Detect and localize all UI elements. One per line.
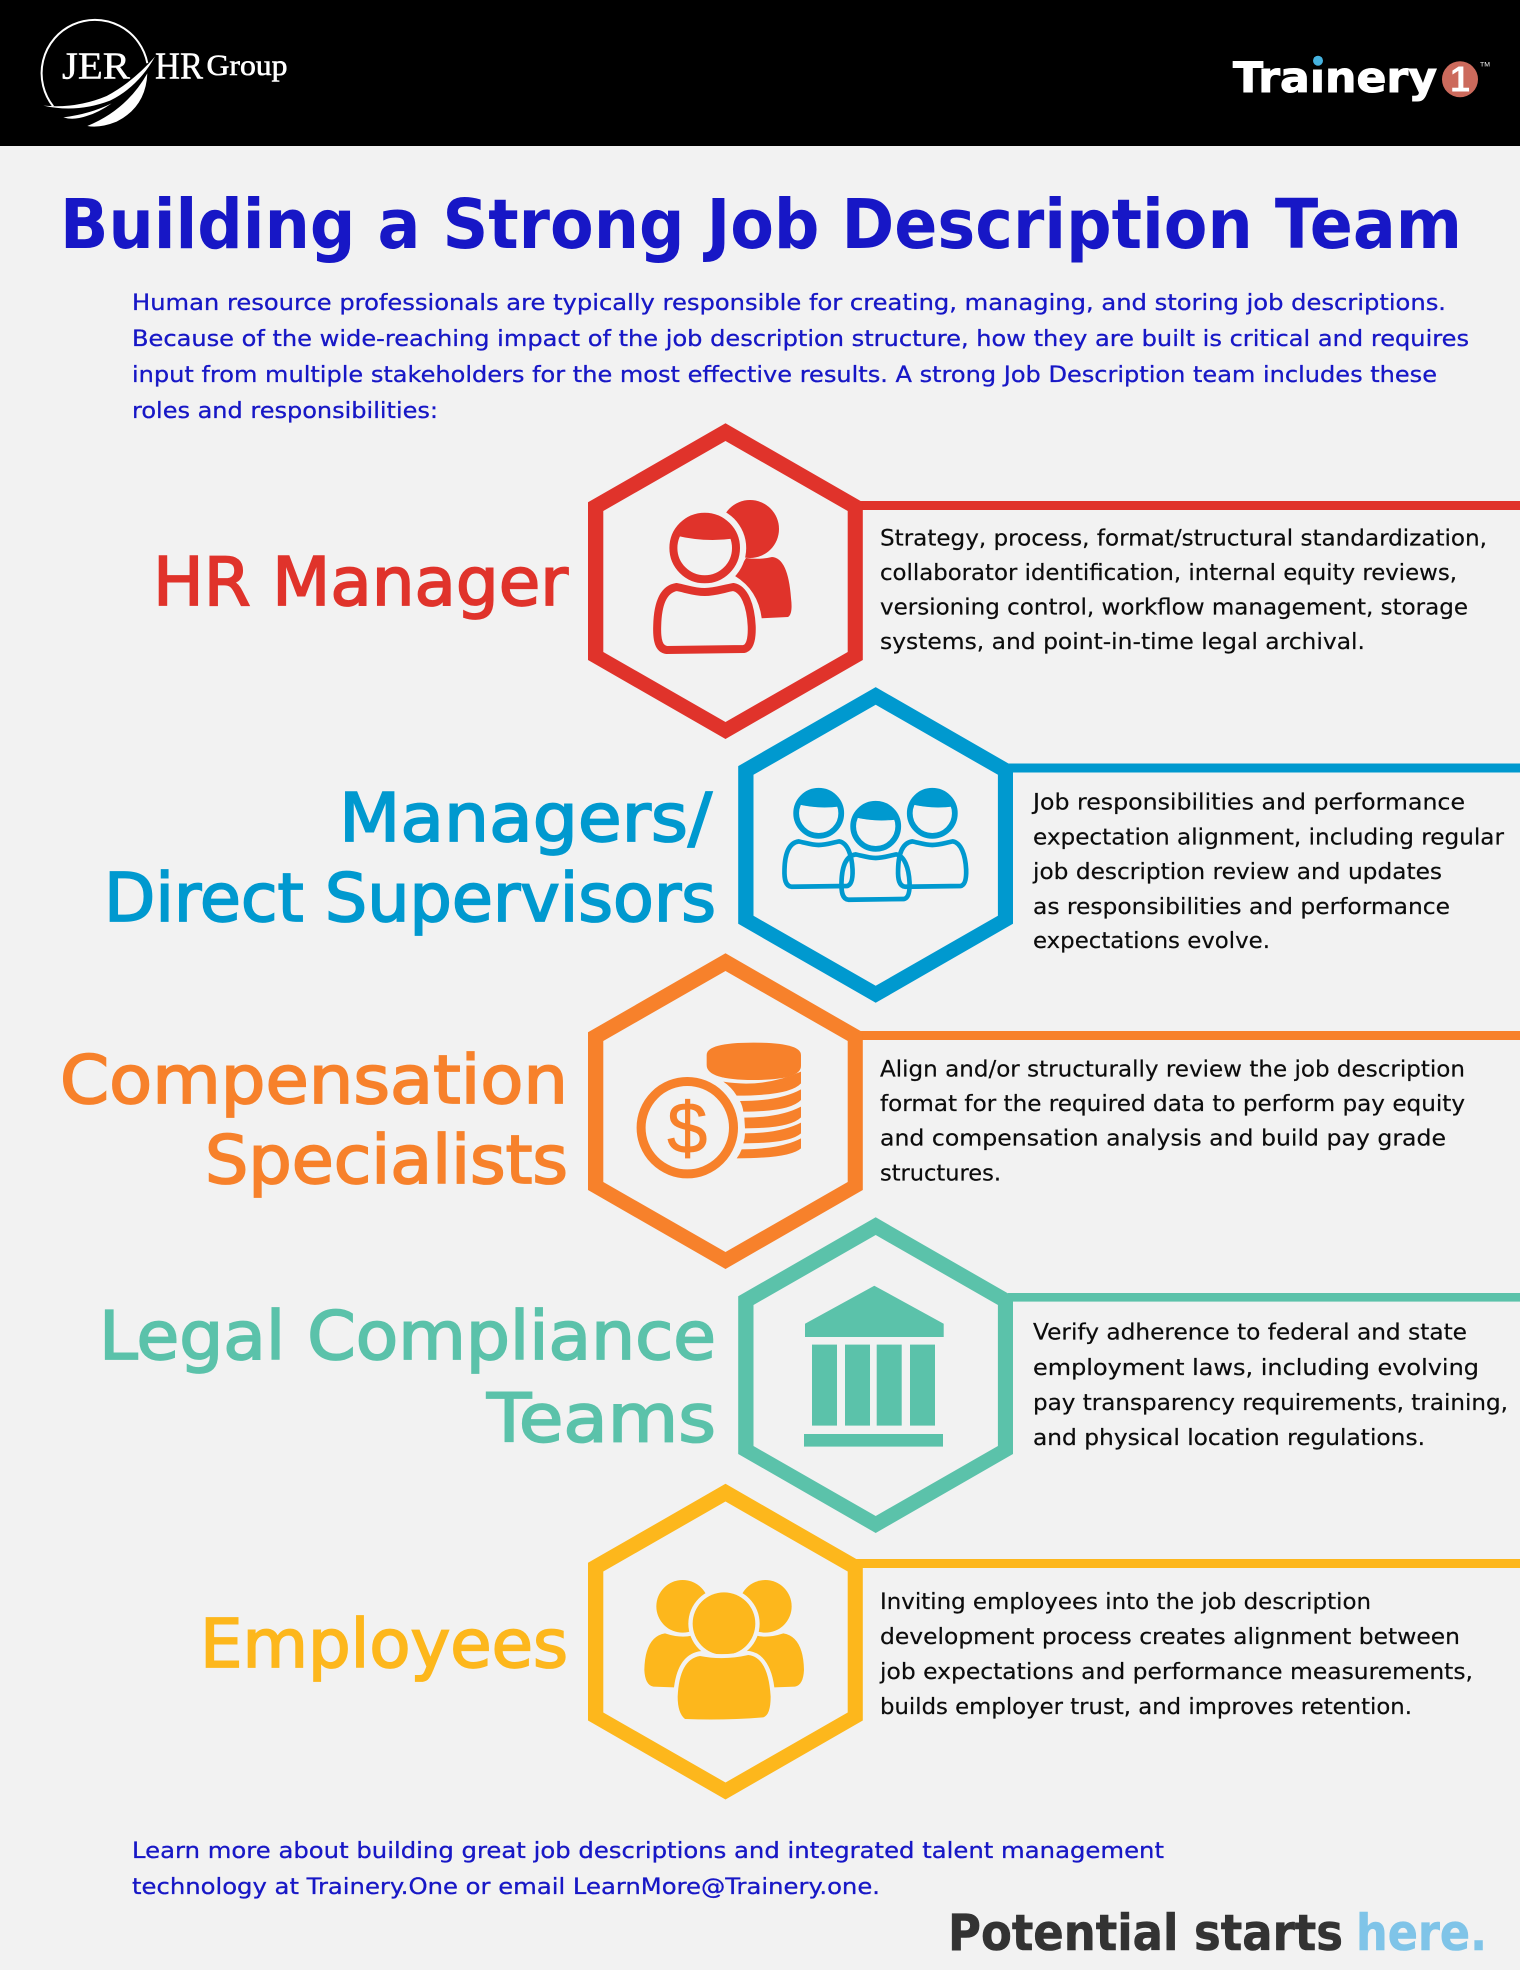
role description: structures. (880, 1162, 1001, 1186)
panel: Managers / Direct Supervisors (104, 687, 1520, 1003)
role title: Legal Compliance (99, 1297, 716, 1375)
role description: pay transparency requirements, training, (1033, 1391, 1508, 1416)
role description (1031, 790, 1505, 954)
hexagon yellow (588, 1484, 863, 1800)
hexagon blue (738, 687, 1013, 1003)
logo: JER HR Group (42, 20, 287, 127)
role description (880, 1058, 1465, 1186)
role description: development process creates alignment between (880, 1625, 1460, 1650)
icon: manager with colleague (657, 500, 792, 650)
intro paragraph (132, 290, 1469, 424)
role description: job expectations and performance measurements, (879, 1660, 1473, 1685)
connector line orange (858, 1031, 1520, 1040)
role description: collaborator identification, internal equity reviews, (880, 561, 1457, 586)
logo: JER HR Group: HR (155, 45, 204, 87)
role description: job description review and updates (1032, 860, 1442, 885)
connector line blue (1008, 764, 1520, 772)
role description: Job responsibilities and performance (1031, 790, 1465, 816)
logo: Trainery One: 1 (1450, 59, 1470, 100)
role description: as responsibilities and performance (1033, 895, 1450, 920)
tagline: here. (1356, 1904, 1487, 1962)
role title (104, 779, 716, 937)
role title (99, 1297, 716, 1458)
role title: Teams (486, 1380, 716, 1458)
panel: Legal Compliance Teams (99, 1217, 1520, 1533)
role title: Compensation (60, 1041, 568, 1119)
role description (879, 1590, 1473, 1720)
footer call to action (132, 1838, 1164, 1900)
hexagon red (588, 423, 863, 739)
icon: three team members (784, 791, 966, 900)
role description: Strategy, process, format/structural standardization, (880, 526, 1487, 552)
role description: versioning control, workflow management, storage (880, 596, 1468, 620)
footer call to action: technology at Trainery.One or email LearnMore@Trainery.one. (132, 1874, 880, 1900)
role description: and compensation analysis and build pay grade (880, 1127, 1446, 1152)
role title: Direct Supervisors (104, 859, 716, 937)
role description (1033, 1321, 1508, 1451)
header band (0, 0, 1520, 146)
role title: HR Manager (153, 543, 568, 621)
role title: Employees (200, 1605, 568, 1683)
hexagon orange (588, 953, 863, 1269)
logo: JER HR Group: JER (62, 45, 131, 87)
icon: courthouse (804, 1286, 944, 1447)
role description: format for the required data to perform pay equity (880, 1092, 1465, 1117)
connector line yellow (853, 1559, 1520, 1568)
logo: Trainery One: TM (1480, 63, 1490, 69)
role description: expectation alignment, including regular (1033, 826, 1505, 850)
panel: HR Manager (153, 423, 1520, 739)
role description: systems, and point-in-time legal archival. (880, 630, 1365, 655)
role description: expectations evolve. (1033, 929, 1270, 954)
icon: employee group (644, 1580, 804, 1720)
role description (880, 526, 1487, 655)
intro paragraph: Because of the wide-reaching impact of the job description structure, how they are built is critical and requires (132, 326, 1469, 352)
role description: builds employer trust, and improves retention. (880, 1695, 1412, 1720)
icon: coin stack with dollar: $ (667, 1089, 707, 1169)
role title: Specialists (205, 1121, 568, 1199)
panel: Employees (200, 1484, 1520, 1800)
intro paragraph: roles and responsibilities: (132, 398, 438, 424)
panel: Compensation Specialists (60, 953, 1520, 1269)
role description: Verify adherence to federal and state (1033, 1321, 1467, 1346)
intro paragraph: input from multiple stakeholders for the most effective results. A strong Job Description team includes these (132, 362, 1437, 388)
role description: Inviting employees into the job description (880, 1590, 1371, 1615)
connector line teal (1008, 1293, 1520, 1302)
connector line red (858, 501, 1520, 510)
icon: coin stack with dollar (641, 1043, 801, 1174)
hexagon teal (738, 1217, 1013, 1533)
role title (60, 1041, 568, 1199)
footer call to action: Learn more about building great job descriptions and integrated talent management (132, 1838, 1164, 1864)
logo: Trainery One: Trainery (1233, 53, 1437, 102)
role description: Align and/or structurally review the job description (880, 1058, 1465, 1082)
logo: JER HR Group: Group (206, 49, 288, 82)
role description: and physical location regulations. (1033, 1426, 1425, 1451)
role title: Managers/ (339, 779, 712, 857)
role description: employment laws, including evolving (1033, 1356, 1479, 1381)
tagline: Potential starts (948, 1904, 1343, 1962)
intro paragraph: Human resource professionals are typically responsible for creating, managing, and storing job descriptions. (132, 290, 1446, 316)
